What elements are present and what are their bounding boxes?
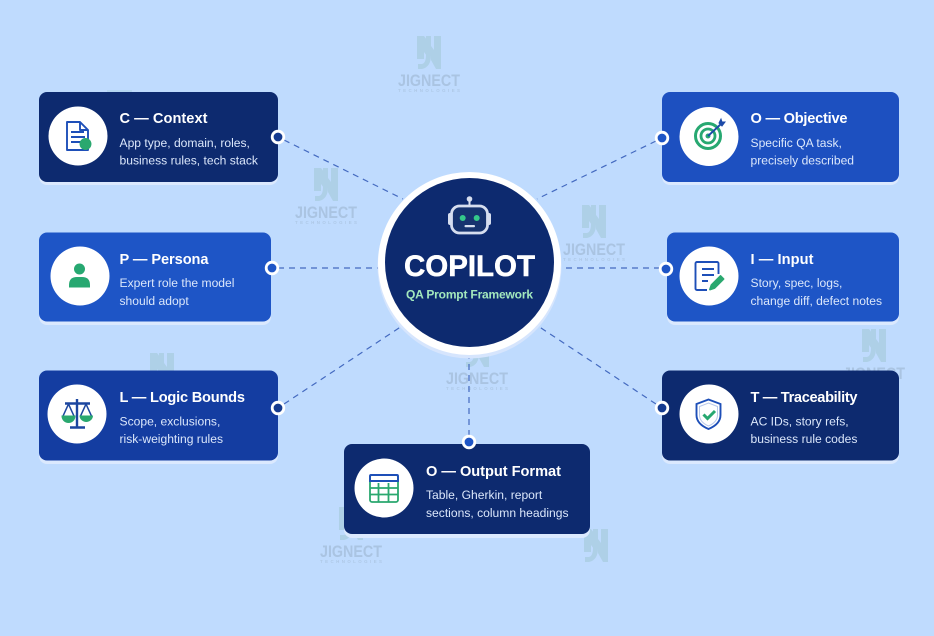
panel: P Persona: [39, 232, 271, 325]
central hub: [378, 172, 562, 358]
icon: robot: [448, 196, 491, 233]
connector dots: [266, 131, 672, 448]
watermarks: JIGNECT: [446, 369, 509, 388]
watermarks: JIGNECT: [320, 542, 383, 561]
title: COPILOT: [404, 250, 535, 283]
icon: document with pen: [696, 262, 724, 290]
watermarks: [107, 36, 906, 564]
icon: shield: [696, 400, 720, 429]
text: L description: risk-weighting rules: [120, 432, 223, 446]
subtitle: QA Prompt Framework: [406, 288, 533, 302]
text: Input description: change diff, defect notes: [750, 294, 882, 308]
heading: O Objective: O — Objective: [750, 111, 848, 127]
text: L description: Scope, exclusions,: [120, 414, 220, 428]
panel: L Logic Bounds: [39, 370, 278, 464]
watermarks: JIGNECT: [563, 240, 626, 259]
text: Output description: sections, column headings: [426, 506, 569, 520]
icon: person: [69, 264, 90, 288]
connector lines: [278, 140, 660, 436]
text: Objective description: Specific QA task,: [750, 136, 842, 150]
watermarks: TECHNOLOGIES: [563, 257, 625, 262]
icon: scales: [62, 399, 92, 428]
heading: L Logic Bounds: L — Logic Bounds: [120, 390, 245, 406]
heading: I Input: I — Input: [750, 252, 814, 268]
panel: O Objective: [662, 92, 899, 185]
text: P description: should adopt: [120, 294, 189, 308]
icon: document: [67, 122, 90, 150]
heading: P Persona: P — Persona: [120, 252, 209, 268]
text: P description: Expert role the model: [120, 276, 234, 290]
panel: C Context: [39, 92, 278, 185]
heading: O Output Format: O — Output Format: [426, 464, 561, 480]
panel: T Traceability: [662, 370, 899, 464]
panel: I Input: [667, 232, 899, 325]
text: C description: App type, domain, roles,: [120, 136, 250, 150]
heading: C Context: C — Context: [120, 111, 208, 127]
text: Traceability description: business rule codes: [750, 432, 857, 446]
watermarks: JIGNECT: [843, 364, 906, 383]
heading: T Traceability: T — Traceability: [750, 390, 858, 406]
text: Output description: Table, Gherkin, report: [426, 488, 543, 502]
watermarks: JIGNECT: [398, 71, 461, 90]
icon: target: [696, 119, 725, 148]
watermarks: TECHNOLOGIES: [320, 559, 382, 564]
text: Objective description: precisely described: [750, 154, 854, 168]
text: Traceability description: AC IDs, story refs,: [750, 414, 849, 428]
watermarks: TECHNOLOGIES: [398, 88, 460, 93]
watermarks: TECHNOLOGIES: [446, 386, 508, 391]
icon: table: [370, 475, 398, 502]
panel: O Output Format: [344, 444, 590, 538]
text: C description: business rules, tech stack: [120, 154, 259, 168]
watermarks: JIGNECT: [295, 203, 358, 222]
text: Input description: Story, spec, logs,: [750, 276, 842, 290]
watermarks: TECHNOLOGIES: [295, 220, 357, 225]
